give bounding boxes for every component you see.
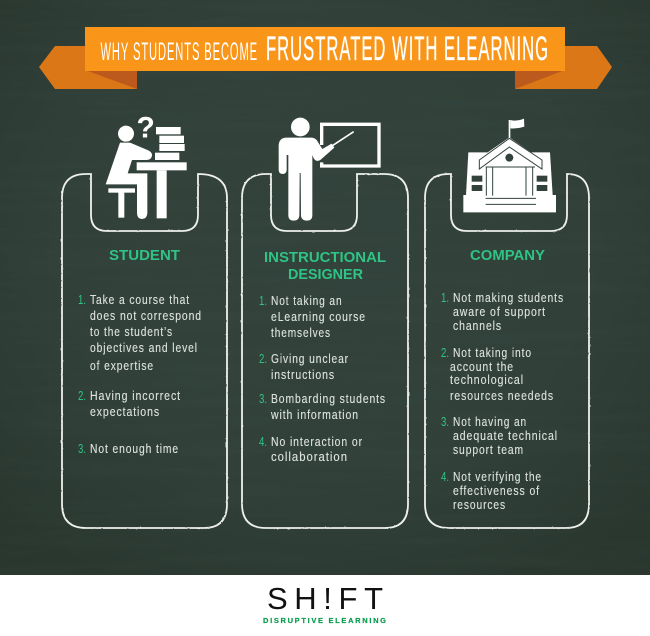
list: designer reasons: 1. (259, 294, 267, 308)
list: student reasons: 2. (78, 389, 86, 403)
heading: company: COMPANY (470, 248, 545, 264)
list: student reasons: objectives and level (90, 341, 198, 355)
list: designer reasons: Not taking an (271, 294, 342, 308)
list: company reasons: resources neededs (450, 389, 554, 403)
title text: WHY STUDENTS BECOME (100, 38, 258, 66)
list: designer reasons: collaboration (271, 450, 348, 464)
ribbon fold: right (515, 70, 565, 89)
list: student reasons: of expertise (90, 359, 154, 373)
heading: instructional designer (264, 250, 386, 283)
list: student reasons: does not correspond (90, 309, 202, 323)
list: company reasons: Not having an (453, 415, 527, 429)
logo: SH!FT: SH!FT (267, 581, 383, 616)
panel: student (62, 112, 227, 528)
chalk outline: company (425, 174, 589, 528)
list: student reasons: Having incorrect (90, 389, 181, 403)
chalk outline: student (62, 174, 227, 528)
list: student reasons: Not enough time (90, 442, 179, 456)
list: designer reasons: themselves (271, 326, 331, 340)
list: company reasons: 4. (441, 470, 449, 484)
heading: instructional designer: DESIGNER (288, 267, 364, 283)
list: company reasons: Not making students (453, 291, 564, 305)
title text (100, 30, 549, 68)
ribbon main band (85, 27, 565, 71)
list: company reasons (441, 291, 564, 512)
list: designer reasons: Giving unclear (271, 352, 349, 366)
list: designer reasons: with information (270, 408, 359, 422)
list: designer reasons (259, 294, 386, 464)
list: designer reasons: Bombarding students (271, 392, 386, 406)
panel: company (425, 119, 589, 528)
ribbon tail: left (39, 46, 137, 89)
list: company reasons: adequate technical (453, 429, 558, 443)
ribbon tail: right (515, 46, 612, 89)
list: designer reasons: 2. (259, 352, 267, 366)
list: designer reasons: 4. (259, 435, 267, 449)
heading: instructional designer: INSTRUCTIONAL (264, 250, 386, 266)
list: company reasons: support team (453, 443, 524, 457)
panel: instructional designer (242, 118, 408, 528)
list: company reasons: effectiveness of (453, 484, 540, 498)
icon: student at desk: ? (137, 112, 155, 145)
logo tagline: DISRUPTIVE ELEARNING (263, 616, 386, 625)
list: company reasons: resources (453, 498, 506, 512)
list: designer reasons: instructions (271, 368, 335, 382)
list: company reasons: aware of support (453, 305, 546, 319)
list: company reasons: Not taking into (453, 346, 532, 360)
list: student reasons: 1. (78, 293, 86, 307)
title ribbon (39, 27, 612, 89)
ribbon fold: left (85, 70, 137, 89)
list: student reasons: Take a course that (90, 293, 190, 307)
list: student reasons: to the student’s (90, 325, 173, 339)
list: company reasons: 1. (441, 291, 449, 305)
list: student reasons: expectations (90, 405, 160, 419)
chalk outline: designer (242, 174, 408, 528)
list: designer reasons: eLearning course (271, 310, 366, 324)
icon: school building (463, 119, 556, 212)
icon: student at desk (106, 112, 187, 219)
list: company reasons: technological (450, 373, 524, 387)
list: student reasons (78, 293, 202, 456)
icon: teacher at board (279, 118, 379, 221)
list: designer reasons: 3. (259, 392, 267, 406)
list: student reasons: 3. (78, 442, 86, 456)
list: company reasons: Not verifying the (453, 470, 542, 484)
footer band (0, 575, 650, 636)
list: company reasons: account the (450, 360, 514, 374)
list: designer reasons: No interaction or (271, 435, 363, 449)
list: company reasons: 2. (441, 346, 449, 360)
list: company reasons: channels (453, 319, 502, 333)
heading: student: STUDENT (109, 248, 180, 264)
list: company reasons: 3. (441, 415, 449, 429)
